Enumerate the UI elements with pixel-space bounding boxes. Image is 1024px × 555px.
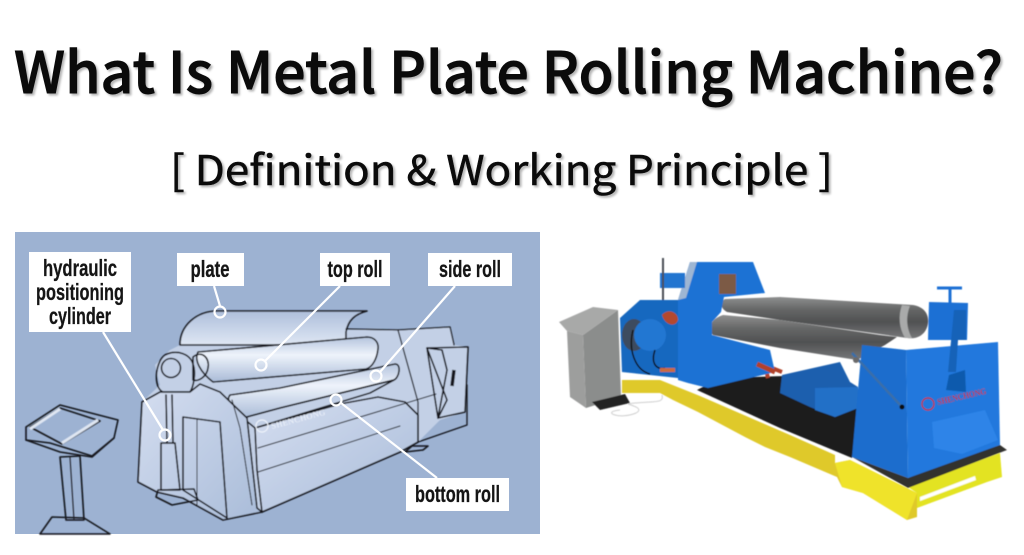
black bed frame	[697, 376, 858, 458]
label: top roll	[320, 253, 390, 286]
label: side roll	[428, 253, 512, 286]
label: hydraulic positioning cylinder: positioning	[36, 279, 124, 305]
label: bottom roll	[406, 478, 509, 511]
left blue housing	[660, 258, 775, 388]
label: hydraulic positioning cylinder: hydraulic	[43, 255, 117, 281]
steel rolls	[710, 297, 928, 360]
logo: SHENCHONG brand	[922, 386, 987, 410]
machine photo	[559, 258, 1007, 520]
panel: labelled machine diagram	[15, 232, 540, 534]
motor block	[620, 300, 678, 378]
icon: control pedestal	[26, 405, 118, 534]
label: side roll: side roll	[439, 256, 501, 282]
label: plate: plate	[190, 256, 230, 282]
illustration: plate rolling machine line drawing	[26, 311, 468, 534]
label: bottom roll: bottom roll	[415, 481, 500, 507]
yellow base	[622, 380, 1002, 520]
leader: side roll	[370, 286, 455, 382]
title: What Is Metal Plate Rolling Machine?	[14, 28, 1003, 110]
grey control cabinet	[559, 307, 662, 416]
logo: SHENCHONG brand: SHENCHONG	[936, 386, 987, 407]
right blue housing	[852, 288, 1007, 488]
icon: SHENCHONG logo watermark: SHENCHONG	[270, 407, 327, 431]
label: hydraulic positioning cylinder	[29, 252, 131, 332]
label: top roll: top roll	[328, 256, 382, 282]
subtitle: [ Definition & Working Principle ]	[170, 137, 833, 197]
leader: plate	[214, 286, 226, 318]
leader: top roll	[256, 286, 340, 370]
label: hydraulic positioning cylinder: cylinder	[49, 303, 111, 329]
leader: bottom roll	[330, 394, 437, 478]
leader: hydraulic cylinder	[103, 332, 170, 440]
label: plate	[177, 253, 244, 286]
second motor	[757, 362, 858, 417]
